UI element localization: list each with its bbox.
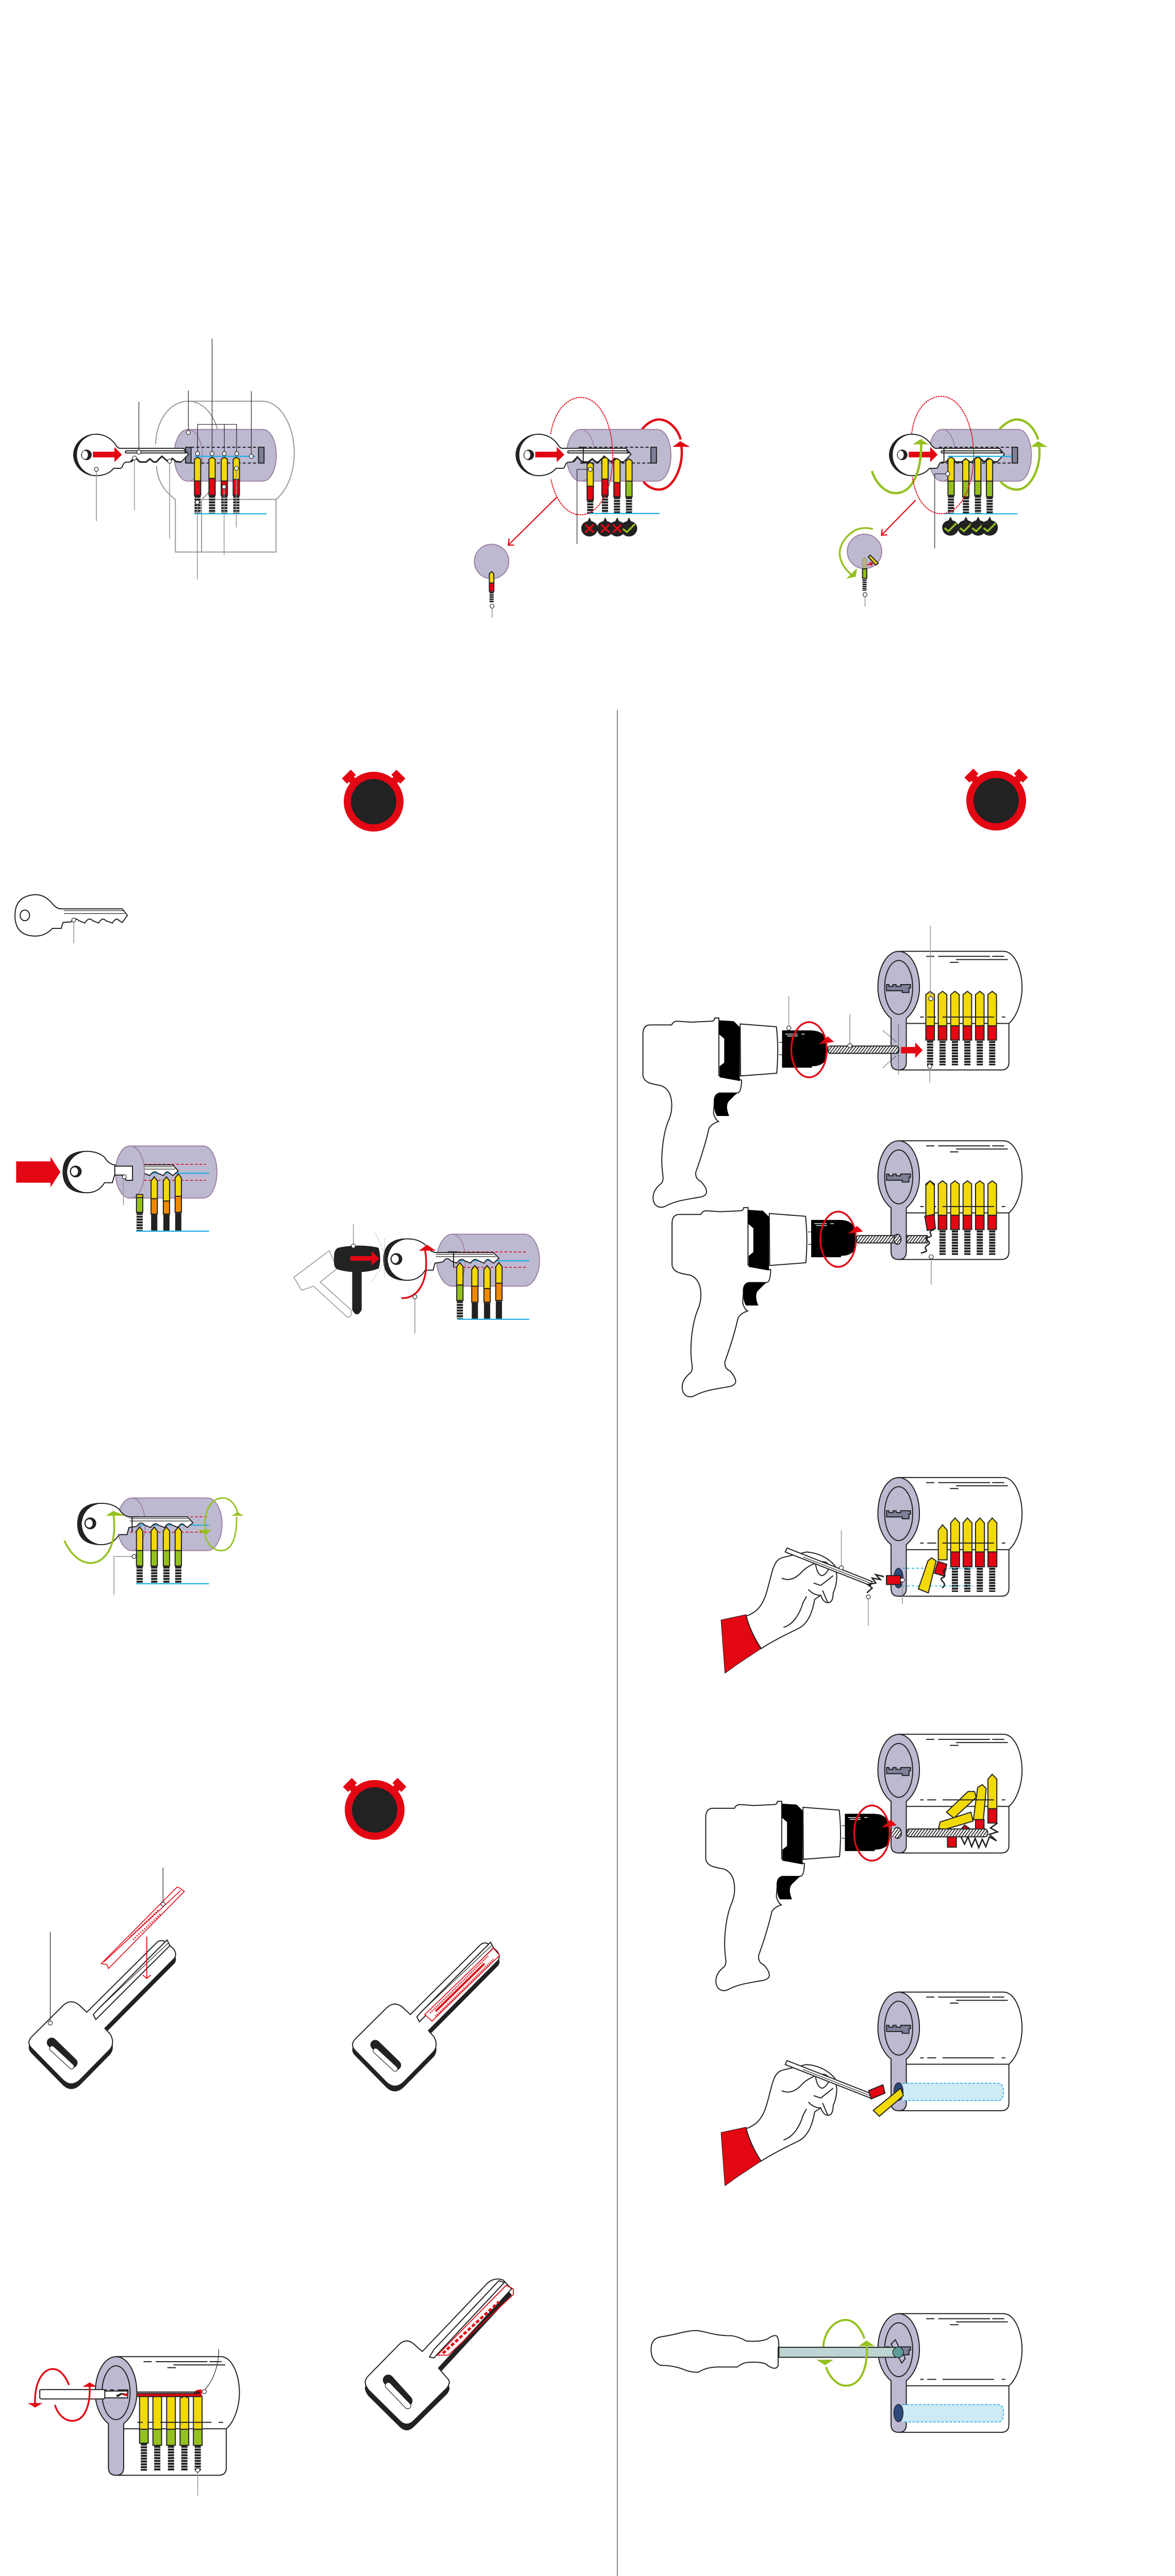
lock cylinder	[878, 1992, 1022, 2111]
keyway front bracket	[579, 447, 585, 463]
status badges	[942, 516, 998, 536]
keyway dashed outline	[939, 447, 1012, 463]
first spring	[927, 1041, 933, 1065]
step: hammer strike	[294, 1224, 540, 1333]
drill bit, broken pin and spring	[856, 1181, 935, 1285]
panel: how a pin cylinder works	[74, 338, 294, 580]
panel: impressioned cylinder	[28, 2349, 240, 2496]
hand with tweezers	[721, 1548, 872, 1673]
keyway dashed outline	[191, 447, 259, 463]
red profile inlay	[438, 2285, 513, 2355]
key groove	[429, 2281, 505, 2358]
insert arrow	[143, 1937, 151, 1978]
detail arrow	[508, 497, 557, 545]
panel: pins cleared with tweezers	[721, 1992, 1022, 2186]
leader lines	[935, 474, 948, 549]
first red pin	[926, 1026, 934, 1040]
key slot	[388, 2380, 408, 2406]
dotted magnifier ellipse	[912, 396, 973, 514]
step: cylinder opens	[64, 1498, 244, 1595]
dashed bottom line	[138, 2422, 223, 2423]
rotor front edge	[580, 429, 595, 481]
leaders	[51, 1868, 163, 2023]
red insert in key	[425, 1948, 499, 2021]
panel: screwdriver opens the cylinder	[651, 2314, 1022, 2432]
pins	[140, 2394, 202, 2471]
lock cylinder	[878, 1478, 1022, 1596]
lock cylinder	[878, 951, 1022, 1070]
drill body placed	[643, 1018, 834, 1207]
callout dots	[490, 467, 592, 608]
drill bit and details	[786, 926, 933, 1082]
detail arrow	[881, 500, 916, 535]
detail pin	[490, 571, 494, 602]
shear line	[586, 513, 660, 514]
green rotation arc	[999, 419, 1039, 489]
key	[352, 1942, 499, 2091]
grey leader	[492, 606, 493, 618]
callout dots	[863, 472, 950, 597]
leader lines	[577, 469, 590, 544]
green detail rotation arrow	[840, 528, 873, 579]
grey leader	[864, 595, 865, 607]
keyway front bracket	[944, 448, 945, 462]
keyway end block	[1012, 447, 1018, 463]
pins	[194, 457, 240, 514]
drill	[672, 1208, 863, 1397]
screwdriver and channel	[651, 2320, 1003, 2422]
empty pin channel, hole, last pin	[869, 2083, 1003, 2116]
key	[74, 434, 189, 476]
panel: drilling out the remaining pins	[706, 1734, 1022, 1991]
lock cylinder	[878, 1734, 1022, 1853]
panel: protected key B	[352, 1942, 499, 2091]
panel: protected key A	[29, 1868, 184, 2089]
pins	[948, 457, 993, 514]
pins	[587, 457, 632, 514]
keyway end blocks	[186, 447, 264, 463]
red rotation front arc	[55, 2386, 90, 2421]
callout dots	[48, 1902, 165, 2025]
grey leader	[197, 2470, 198, 2496]
detail circle	[474, 544, 509, 579]
arrowhead	[1031, 441, 1048, 447]
hand with tweezers	[721, 2061, 872, 2186]
callout dots	[94, 431, 253, 504]
rotor front edge	[942, 429, 955, 481]
leader lines	[204, 2349, 219, 2390]
rotor front edge	[188, 429, 203, 481]
icon: stopwatch method 2	[964, 769, 1028, 831]
lock cylinder	[878, 2314, 1022, 2432]
bump key	[15, 895, 127, 943]
key shadow	[365, 2285, 512, 2430]
panel: bump key steps	[15, 895, 540, 1595]
keyway dashed outline	[579, 447, 651, 463]
detail circle	[847, 534, 882, 569]
detail pin	[863, 555, 878, 591]
rotor	[929, 429, 1031, 481]
red insert strip	[101, 1887, 184, 1969]
panel: protected key C	[365, 2279, 513, 2430]
step: key inserted	[16, 1146, 217, 1231]
dotted magnifier ellipse	[551, 397, 613, 515]
key	[516, 434, 631, 476]
red rotation arc	[642, 419, 682, 489]
keyway end block	[651, 447, 657, 463]
panel: rotation torque binds the pins	[474, 397, 690, 618]
red rotation back arc	[35, 2369, 69, 2404]
pins, hole, spring	[839, 1518, 1005, 1626]
cylinder	[95, 2357, 240, 2476]
cylinder housing outline	[156, 401, 294, 552]
shear lines	[945, 456, 1017, 514]
icon: stopwatch method 3	[343, 1778, 407, 1840]
red arrowheads	[28, 2382, 97, 2408]
panel: drill attack, second pin	[672, 1141, 1022, 1397]
icon: stopwatch method 1	[342, 770, 406, 832]
divider: central vertical line	[617, 710, 618, 2576]
shear lines	[194, 456, 267, 514]
rotation arrowhead	[673, 441, 690, 447]
callout dots	[196, 2389, 207, 2472]
panel: all pins aligned, cylinder turns	[840, 396, 1048, 607]
rotor	[174, 429, 276, 481]
lock cylinder	[878, 1141, 1022, 1260]
broken pins and bit	[892, 1774, 1005, 1848]
rotor	[566, 429, 671, 481]
key body	[365, 2279, 512, 2424]
leader lines	[96, 338, 251, 580]
key shaft with red filler	[40, 2389, 202, 2399]
key	[29, 1940, 176, 2089]
drill	[706, 1801, 897, 1991]
status badges	[581, 517, 637, 536]
key	[889, 434, 1004, 476]
panel: drill attack, first pin	[643, 926, 1022, 1207]
panel: pin removal with tweezers	[721, 1478, 1022, 1673]
left green rotation arrow	[872, 439, 929, 493]
